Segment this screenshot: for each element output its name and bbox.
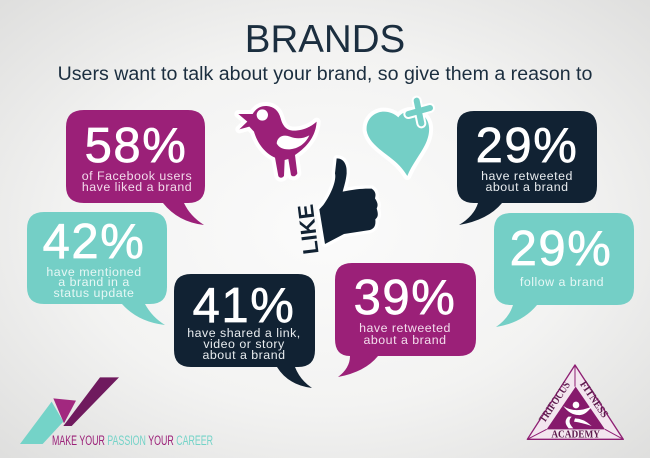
speech bubble: 29% retweeted: about a brand (486, 180, 568, 194)
logo mark (20, 377, 119, 444)
icon: heart with plus (367, 101, 430, 176)
speech bubble: 42% mentioned a brand: a brand in a (58, 275, 130, 289)
speech bubble: 39% retweeted: about a brand (364, 333, 446, 347)
subtitle: Users want to talk about your brand, so give them a reason to (58, 63, 592, 85)
logo: make your passion your career (20, 377, 213, 448)
speech bubble: 42% mentioned a brand: have mentioned (46, 265, 142, 279)
logo: Trifocus Fitness Academy: TRIFOCUS (537, 380, 573, 425)
speech bubble: 29% retweeted: 29% (476, 119, 578, 173)
icon: thumbs up with LIKE: LIKE (293, 203, 324, 256)
icon: bird (238, 106, 317, 178)
speech bubble: 41% shared a link: video or story (203, 337, 285, 351)
speech bubble: 39% retweeted: have retweeted (359, 321, 451, 335)
title: BRANDS (245, 18, 405, 61)
speech bubble: 29% follow a brand: 29% (510, 222, 612, 276)
speech bubble: 58% of Facebook users: of Facebook users (82, 169, 192, 183)
speech bubble: 29% retweeted: have retweeted (481, 169, 573, 183)
speech bubble: 58% of Facebook users: have liked a brand (82, 180, 192, 194)
speech bubble: 41% shared a link: 41% (193, 279, 295, 333)
speech bubble: 39% retweeted (335, 263, 476, 377)
speech bubble: 29% follow a brand (494, 213, 634, 327)
speech bubble: 42% mentioned a brand (27, 212, 167, 325)
logo: Trifocus Fitness Academy: FITNESS (577, 379, 610, 420)
speech bubble: 58% of Facebook users (66, 110, 205, 225)
speech bubble: 42% mentioned a brand: status update (54, 286, 134, 300)
speech bubble: 39% retweeted: 39% (354, 271, 456, 325)
logo: Trifocus Fitness Academy (527, 365, 623, 441)
logo tagline: MAKE YOUR PASSION YOUR CAREER (52, 433, 213, 448)
speech bubble: 29% retweeted (457, 111, 597, 225)
speech bubble: 58% of Facebook users: 58% (85, 119, 187, 173)
speech bubble: 41% shared a link: have shared a link, (187, 326, 301, 340)
logo: Trifocus Fitness Academy: ACADEMY (551, 430, 601, 441)
speech bubble: 29% follow a brand: follow a brand (520, 275, 604, 289)
icon: thumbs up with LIKE (293, 158, 378, 256)
speech bubble: 42% mentioned a brand: 42% (43, 215, 145, 269)
speech bubble: 41% shared a link (174, 274, 315, 388)
speech bubble: 41% shared a link: about a brand (203, 348, 285, 362)
